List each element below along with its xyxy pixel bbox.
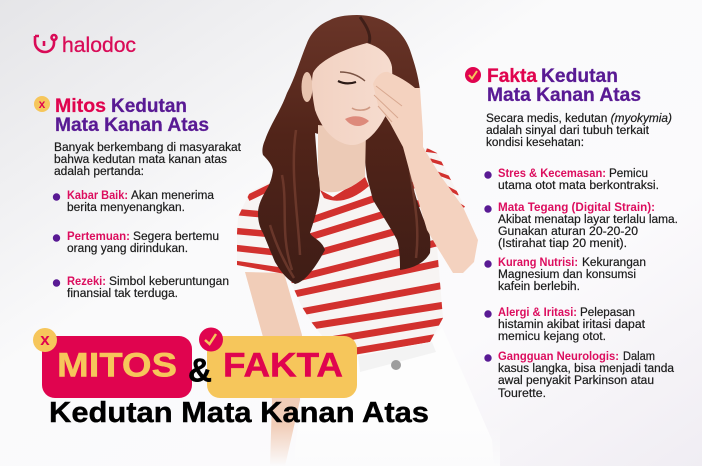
item: gangguan neurologis: Gangguan Neurologis:: [498, 351, 619, 363]
item: rezeki: Rezeki:: [67, 276, 106, 288]
item: alergi: histamin akibat iritasi dapat: [498, 319, 646, 331]
intro text: Secara medis, kedutan (myokymia): [486, 113, 672, 125]
item: kabar baik: [53, 190, 215, 214]
heading: fakta: Fakta: [487, 65, 537, 87]
heading: fakta: [487, 65, 641, 106]
icon: x badge: x: [39, 97, 46, 111]
neck: [318, 125, 366, 192]
heading: mitos: Mitos: [55, 95, 106, 117]
icon: stethoscope: [35, 35, 56, 52]
item: rezeki: [53, 276, 229, 300]
item: gangguan neurologis: kasus langka, bisa menjadi tanda: [498, 363, 675, 375]
intro text: kondisi kesehatan:: [486, 137, 584, 149]
item: kurang nutrisi: [484, 257, 646, 293]
panel: mitos: [34, 95, 242, 300]
item: stres: utama otot mata berkontraksi.: [498, 180, 659, 192]
icon: x badge: [33, 328, 57, 352]
item: alergi: Alergi & Iritasi:: [498, 307, 577, 319]
heading: mitos: Mata Kanan Atas: [55, 114, 209, 136]
item: stres: Pemicu: [609, 168, 648, 180]
ampersand: &: [188, 352, 212, 388]
banner title: [33, 328, 429, 429]
item: kurang nutrisi: Kurang Nutrisi:: [498, 257, 578, 269]
item: gangguan neurologis: Tourette.: [498, 388, 546, 400]
heading: fakta: Kedutan: [541, 65, 618, 87]
item: pertemuan: Pertemuan:: [67, 231, 130, 243]
raised hand and forearm: [373, 72, 478, 273]
photo: woman rubbing her eye: [237, 15, 478, 461]
item: gangguan neurologis: [484, 351, 675, 400]
skirt fade: [260, 425, 500, 466]
intro text: adalah pertanda:: [54, 166, 144, 178]
white skirt: [293, 327, 494, 466]
icon: check badge: [199, 328, 223, 352]
striped shirt: [237, 148, 465, 354]
item: kabar baik: Akan menerima: [131, 190, 215, 202]
item: mata tegang: [484, 202, 678, 250]
heading: fakta: Mata Kanan Atas: [487, 84, 641, 106]
badge: fakta: [207, 336, 357, 398]
item: alergi: [484, 307, 646, 343]
intro text: [54, 142, 242, 178]
item: stres: [484, 168, 659, 192]
item: mata tegang: (Istirahat tiap 20 menit).: [498, 238, 627, 250]
icon: x badge: x: [40, 330, 50, 349]
face: [312, 43, 393, 145]
item: kurang nutrisi: kafein berlebih.: [498, 281, 580, 293]
item: gangguan neurologis: awal penyakit Parkinson atau: [498, 375, 654, 387]
badge: fakta: FAKTA: [223, 346, 343, 384]
long brown hair: [258, 15, 430, 284]
heading: mitos: [55, 95, 209, 136]
item: kabar baik: berita menyenangkan.: [67, 202, 185, 214]
logo: halodoc: halodoc: [62, 34, 136, 57]
item: kabar baik: Kabar Baik:: [67, 190, 128, 202]
icon: x badge: [34, 96, 50, 112]
panel: fakta: [465, 65, 678, 400]
intro text: adalah sinyal dari tubuh terkait: [486, 125, 650, 137]
item: kurang nutrisi: Kekurangan: [582, 257, 646, 269]
intro text: [486, 113, 672, 149]
item: alergi: Pelepasan: [580, 307, 635, 319]
ear: [302, 72, 312, 102]
intro text: Banyak berkembang di masyarakat: [54, 142, 242, 154]
intro text: bahwa kedutan mata kanan atas: [54, 154, 227, 166]
item: pertemuan: orang yang dirindukan.: [67, 243, 188, 255]
item: mata tegang: Gunakan aturan 20-20-20: [498, 226, 638, 238]
item: gangguan neurologis: Dalam: [623, 351, 655, 363]
item: stres: Stres & Kecemasan:: [498, 168, 606, 180]
heading: mitos: Kedutan: [111, 95, 187, 117]
badge: mitos: MITOS: [57, 346, 177, 384]
item: rezeki: finansial tak terduga.: [67, 288, 178, 300]
icon: check badge: [465, 67, 481, 83]
badge: mitos: [42, 336, 192, 398]
item: pertemuan: Segera bertemu: [133, 231, 219, 243]
item: mata tegang: Akibat menatap layar terlalu lama.: [498, 214, 678, 226]
left arm: [245, 272, 302, 466]
item: pertemuan: [53, 231, 219, 255]
item: mata tegang: Mata Tegang (Digital Strain):: [498, 202, 655, 214]
item: kurang nutrisi: Magnesium dan konsumsi: [498, 269, 636, 281]
item: alergi: memicu kejang otot.: [498, 331, 606, 343]
subtitle: Kedutan Mata Kanan Atas: [49, 397, 429, 429]
item: rezeki: Simbol keberuntungan: [109, 276, 229, 288]
eye, brows, nose, mouth: [338, 72, 370, 126]
